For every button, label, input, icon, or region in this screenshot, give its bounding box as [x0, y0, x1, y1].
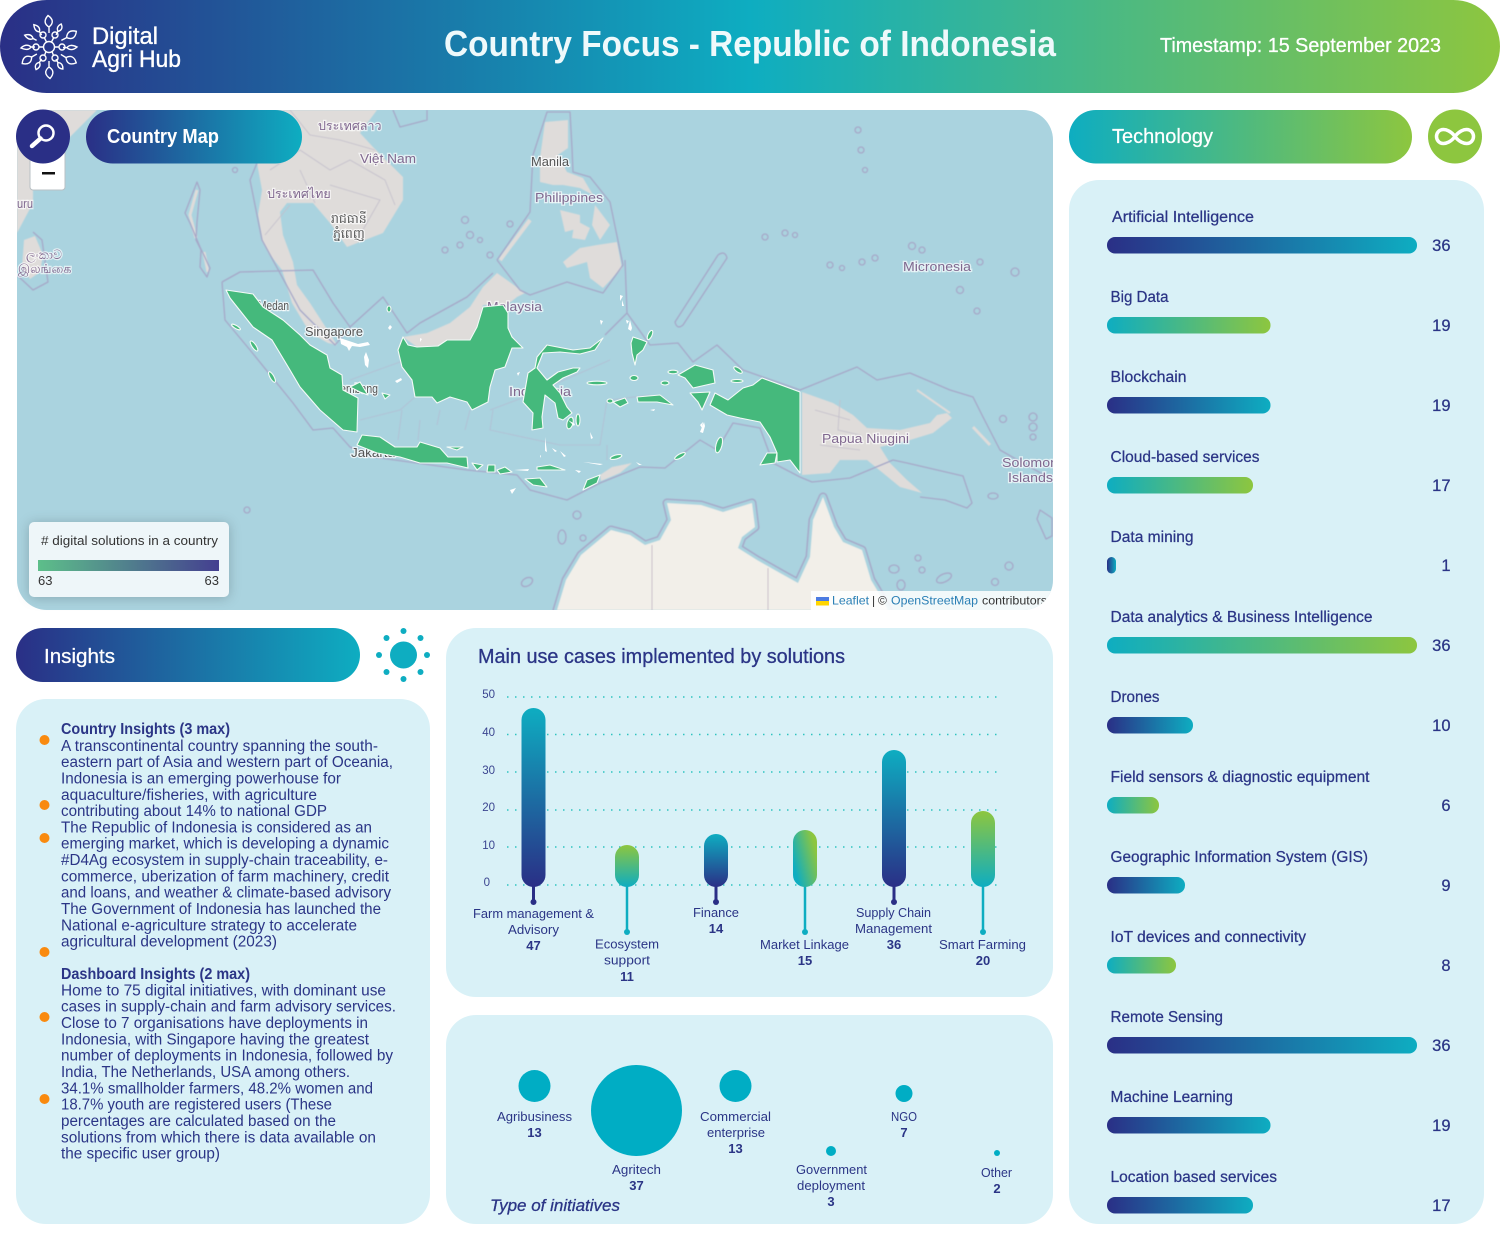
row: Blockchain: 19	[1432, 397, 1450, 415]
row: Data analytics & Business Intelligence	[1107, 609, 1450, 655]
row: Big Data: Big Data	[1110, 289, 1169, 306]
choropleth: Indonesia	[226, 290, 800, 494]
basemap labels: រាជធានី	[331, 211, 367, 226]
country insights text: National e-agriculture strategy to accelerate	[61, 917, 357, 934]
heading: Insights	[16, 628, 360, 682]
basemap labels: uru	[17, 197, 33, 211]
bar: Ecosystem support: Ecosystem	[595, 936, 659, 952]
bar: Farm management & Advisory: 47	[526, 938, 541, 953]
dashboard insights text: 34.1% smallholder farmers, 48.2% women and	[61, 1080, 373, 1097]
bar: Farm management & Advisory: Farm management &	[473, 906, 594, 921]
row: Cloud-based services: 17	[1432, 477, 1450, 495]
row: Data mining	[1107, 529, 1450, 575]
basemap labels: இலங்கை	[18, 262, 71, 277]
dashboard insights text: cases in supply-chain and farm advisory services.	[61, 999, 396, 1016]
bubble: NGO: 7	[900, 1125, 908, 1140]
row: IoT devices and connectivity: IoT devices and connectivity	[1110, 929, 1306, 946]
timestamp: Timestamp: 15 September 2023	[1160, 35, 1441, 57]
bubble: Government deployment: deployment	[797, 1178, 865, 1193]
bar: Smart Farming: Smart Farming	[939, 937, 1026, 952]
bubble: Other: 2	[993, 1181, 1001, 1196]
country insights text: Country Insights (3 max)	[61, 721, 230, 738]
dashboard insights text: Close to 7 organisations have deployments in	[61, 1015, 368, 1032]
country insights text: contributing about 14% to national GDP	[61, 803, 327, 820]
row: Location based services: Location based services	[1110, 1169, 1277, 1186]
basemap attribution: OpenStreetMap	[891, 594, 978, 608]
country insights text: eastern part of Asia and western part of Oceania,	[61, 754, 393, 771]
row: Field sensors & diagnostic equipment: 6	[1441, 797, 1450, 815]
row: Drones	[1107, 689, 1450, 735]
row: Data mining: 1	[1441, 557, 1450, 575]
bubble: Government deployment: 3	[827, 1194, 835, 1209]
y axis: 10	[482, 840, 495, 852]
basemap attribution: contributors	[982, 594, 1047, 608]
country insights text: aquaculture/fisheries, with agriculture	[61, 787, 317, 804]
basemap labels: Jakarta	[351, 446, 395, 460]
bar: Finance: Finance	[693, 905, 739, 920]
bar: Ecosystem support: 11	[620, 969, 634, 984]
row: Remote Sensing: 36	[1432, 1037, 1450, 1055]
row: Geographic Information System (GIS): 9	[1441, 877, 1450, 895]
map legend: # digital solutions in a country	[41, 533, 219, 548]
row: Data analytics & Business Intelligence: 36	[1432, 637, 1450, 655]
panel: country map	[17, 110, 1058, 610]
dashboard insights text: percentages are calculated based on the	[61, 1113, 336, 1130]
logo wordmark: Digital	[92, 23, 158, 50]
y axis	[482, 689, 495, 889]
map zoom control	[30, 148, 65, 190]
basemap labels: Medan	[258, 299, 289, 313]
chart title: Main use cases implemented by solutions	[478, 646, 845, 668]
row: Blockchain	[1107, 369, 1450, 415]
basemap labels: Islands	[1008, 471, 1053, 485]
icon: sun	[376, 628, 430, 682]
bar: Ecosystem support	[595, 845, 659, 984]
basemap labels: Palembang	[325, 382, 378, 396]
basemap labels: ประเทศลาว	[318, 119, 382, 133]
dashboard insights text: solutions from which there is data available on	[61, 1129, 376, 1146]
heading: Technology: Technology	[1112, 126, 1213, 148]
row: Machine Learning	[1107, 1089, 1450, 1135]
y axis: 30	[482, 765, 495, 777]
bar: Farm management & Advisory: Advisory	[508, 922, 559, 937]
bubble: Agritech: 37	[629, 1178, 644, 1193]
bar chart	[473, 689, 1026, 984]
country insights text: The Government of Indonesia has launched the	[61, 901, 381, 918]
dashboard insights text: 18.7% youth are registered users (These	[61, 1097, 332, 1114]
bar: Smart Farming	[939, 811, 1026, 968]
bar: Market Linkage	[760, 830, 849, 968]
bar: Supply Chain Management: 36	[887, 937, 901, 952]
bar: Market Linkage: 15	[798, 953, 812, 968]
bubble: Commercial enterprise: 13	[728, 1141, 743, 1156]
basemap labels: Việt Nam	[360, 152, 416, 166]
bar: Supply Chain Management	[855, 750, 932, 952]
logo wordmark: Agri Hub	[92, 46, 181, 73]
dashboard insights text: number of deployments in Indonesia, followed by	[61, 1048, 393, 1065]
row: Cloud-based services	[1107, 449, 1450, 495]
chart caption: Type of initiatives	[490, 1196, 620, 1215]
row: Data mining: Data mining	[1110, 529, 1194, 546]
y axis: 0	[484, 877, 490, 889]
row: Drones: Drones	[1110, 689, 1160, 706]
bubble: Other: Other	[981, 1165, 1013, 1180]
bubble: NGO	[891, 1085, 917, 1140]
heading: Technology	[1069, 110, 1412, 164]
country insights text: The Republic of Indonesia is considered as an	[61, 819, 372, 836]
basemap boundaries	[17, 110, 1053, 590]
dashboard insights text: Home to 75 digital initiatives, with dominant use	[61, 982, 386, 999]
bar: Supply Chain Management: Management	[855, 921, 932, 936]
y axis: 50	[482, 689, 495, 701]
panel: insights	[16, 699, 430, 1224]
row: Machine Learning: Machine Learning	[1110, 1089, 1233, 1106]
Australia with offset maritime outline	[557, 497, 888, 610]
row: Big Data: 19	[1432, 317, 1450, 335]
basemap labels: Philippines	[535, 191, 603, 205]
bubble: Commercial enterprise: Commercial	[700, 1109, 771, 1124]
row: Drones: 10	[1432, 717, 1450, 735]
bubble: Agribusiness: 13	[527, 1125, 542, 1140]
bar: Finance	[693, 834, 739, 936]
header banner	[0, 0, 1500, 93]
row: Geographic Information System (GIS): Geographic Information System (GIS)	[1110, 849, 1368, 866]
row: IoT devices and connectivity	[1107, 929, 1450, 975]
panel: main use cases	[446, 628, 1053, 997]
heading: Country Map: Country Map	[107, 126, 219, 148]
y axis: 20	[482, 802, 495, 814]
bullets	[40, 735, 50, 1104]
dashboard insights text	[61, 966, 396, 1163]
row: Geographic Information System (GIS)	[1107, 849, 1450, 895]
y axis: 40	[482, 727, 495, 739]
basemap labels: Micronesia	[903, 260, 971, 274]
row: Field sensors & diagnostic equipment: Field sensors & diagnostic equipment	[1110, 769, 1370, 786]
bubble: Commercial enterprise: enterprise	[707, 1125, 765, 1140]
bar: Finance: 14	[709, 921, 724, 936]
basemap labels	[17, 119, 1058, 485]
bubble: Commercial enterprise	[700, 1070, 771, 1156]
basemap labels: ភ្នំពេញ	[333, 226, 365, 242]
map legend	[29, 522, 229, 597]
row: Cloud-based services: Cloud-based services	[1110, 449, 1260, 466]
bar: Ecosystem support: support	[604, 952, 650, 968]
basemap labels: ලංකාව	[26, 248, 62, 263]
row: Artificial Intelligence: Artificial Intelligence	[1112, 209, 1254, 226]
country insights text: Indonesia is an emerging powerhouse for	[61, 770, 341, 788]
row: Artificial Intelligence	[1107, 209, 1450, 255]
row: Machine Learning: 19	[1432, 1117, 1450, 1135]
row: Remote Sensing	[1107, 1009, 1450, 1055]
bar: Supply Chain Management: Supply Chain	[856, 905, 931, 920]
bubble: NGO: NGO	[891, 1109, 917, 1124]
icon: infinity	[1428, 110, 1482, 164]
icon: Digital Agri Hub logo	[20, 16, 78, 78]
row: Artificial Intelligence: 36	[1432, 237, 1450, 255]
panel: technology	[1069, 180, 1484, 1224]
row: IoT devices and connectivity: 8	[1441, 957, 1450, 975]
row: Blockchain: Blockchain	[1110, 369, 1186, 386]
title: Country Focus - Republic of Indonesia	[444, 23, 1057, 64]
row: Location based services: 17	[1432, 1197, 1450, 1215]
bubble: Agribusiness: Agribusiness	[497, 1109, 572, 1124]
basemap labels: ประเทศไทย	[267, 187, 331, 201]
basemap labels: Singapore	[305, 325, 363, 339]
heading: Country Map	[86, 110, 302, 164]
heading: Insights: Insights	[44, 646, 115, 668]
basemap land	[17, 110, 990, 610]
dashboard insights text: India, The Netherlands, USA among others.	[61, 1064, 350, 1081]
basemap labels: Solomon	[1002, 456, 1058, 470]
row: Data analytics & Business Intelligence: Data analytics & Business Intelligence	[1110, 609, 1372, 626]
basemap labels: Malaysia	[487, 300, 542, 314]
basemap attribution: |	[872, 594, 875, 608]
dashboard insights text: Dashboard Insights (2 max)	[61, 966, 250, 983]
row: Field sensors & diagnostic equipment	[1107, 769, 1450, 815]
bubble: Other	[981, 1150, 1013, 1196]
basemap attribution	[811, 591, 1053, 610]
bubble: Agritech: Agritech	[612, 1162, 661, 1177]
country insights text: commerce, uberization of farm machinery, credit	[61, 868, 390, 885]
row: Location based services	[1107, 1169, 1450, 1215]
bar: Smart Farming: 20	[976, 953, 990, 968]
bubble: Agribusiness	[497, 1070, 572, 1140]
country insights text	[61, 721, 393, 951]
map legend: 63	[205, 573, 219, 588]
basemap attribution: Leaflet	[832, 594, 870, 608]
basemap labels: Indonesia	[509, 385, 571, 399]
bubble: Government deployment	[796, 1146, 867, 1209]
country insights text: agricultural development (2023)	[61, 934, 277, 951]
bubble: Government deployment: Government	[796, 1162, 867, 1177]
basemap attribution: ©	[878, 594, 887, 608]
country insights text: #D4Ag ecosystem in supply-chain traceability, e-	[61, 852, 388, 869]
basemap labels: Papua Niugini	[822, 432, 909, 446]
logo wordmark	[92, 23, 181, 73]
dashboard insights text: the specific user group)	[61, 1146, 220, 1163]
map legend: 63	[38, 573, 52, 588]
country insights text: A transcontinental country spanning the south-	[61, 738, 378, 755]
panel: type of initiatives	[446, 1015, 1053, 1224]
bubble: Agritech	[591, 1065, 682, 1193]
row: Big Data	[1107, 289, 1450, 335]
bar: Farm management & Advisory	[473, 708, 594, 953]
basemap labels: Manila	[531, 155, 569, 169]
icon: magnifier	[16, 110, 70, 164]
row: Remote Sensing: Remote Sensing	[1110, 1009, 1223, 1026]
country insights text: emerging market, which is developing a dynamic	[61, 836, 389, 853]
country insights text: and loans, and weather & climate-based advisory	[61, 885, 391, 902]
bar: Market Linkage: Market Linkage	[760, 937, 849, 952]
dashboard insights text: Indonesia, with Singapore having the greatest	[61, 1031, 370, 1048]
